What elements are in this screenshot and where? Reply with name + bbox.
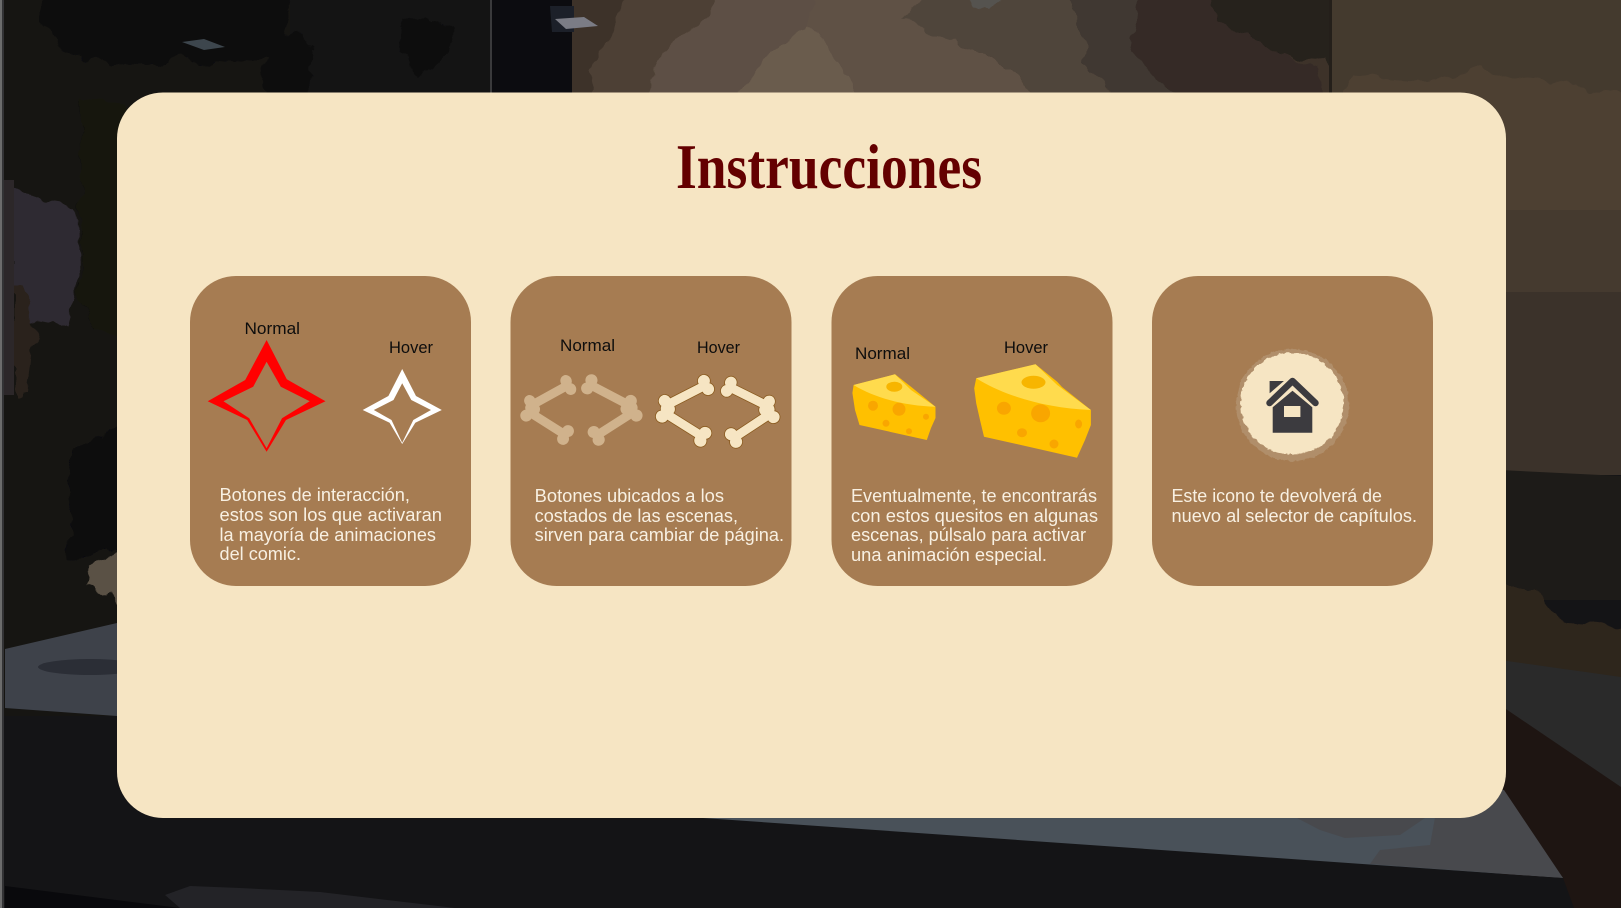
text: cheese: una animación especial. [851, 545, 1047, 565]
card: page buttons [510, 276, 792, 586]
brown rock wall top [572, 0, 1345, 110]
text: home [1172, 486, 1417, 526]
text: interaction buttons [220, 485, 442, 564]
card: home [1152, 276, 1433, 586]
icon: red star [208, 340, 326, 452]
icon: home button [1236, 349, 1349, 461]
icon: normal cheese [852, 374, 936, 440]
text: page buttons: costados de las escenas, [535, 506, 738, 526]
label: hover star: Hover [389, 338, 433, 357]
main panel [117, 92, 1506, 818]
text: page buttons [535, 486, 784, 545]
label: hover bones: Hover [697, 338, 740, 357]
text: interaction buttons: estos son los que activaran [220, 505, 442, 525]
card: interaction buttons [190, 276, 471, 586]
text: cheese: con estos quesitos en algunas [851, 506, 1098, 526]
icon: hover bones [654, 373, 782, 450]
text: interaction buttons: la mayoría de animaciones [220, 525, 436, 545]
text: interaction buttons: Botones de interacción, [220, 485, 410, 505]
title: Instrucciones [676, 131, 982, 202]
text: cheese [851, 486, 1098, 565]
label: normal star: Normal [244, 319, 300, 338]
card: cheese [832, 276, 1112, 586]
text: home: nuevo al selector de capítulos. [1172, 506, 1417, 526]
floor bottom [703, 790, 1563, 878]
text: interaction buttons: del comic. [220, 544, 301, 564]
text: cheese: Eventualmente, te encontrarás [851, 486, 1097, 506]
text: page buttons: Botones ubicados a los [535, 486, 724, 506]
text: cheese: escenas, púlsalo para activar [851, 525, 1086, 545]
label: hover cheese: Hover [1004, 338, 1048, 357]
icon: hover cheese [974, 364, 1091, 458]
icon: normal bones [518, 372, 645, 448]
small ceiling lights [182, 6, 598, 50]
text: page buttons: sirven para cambiar de página. [535, 525, 784, 545]
icon: white star [363, 369, 442, 444]
label: normal bones: Normal [560, 336, 615, 355]
label: normal cheese: Normal [855, 344, 910, 363]
text: home: Este icono te devolverá de [1172, 486, 1382, 506]
